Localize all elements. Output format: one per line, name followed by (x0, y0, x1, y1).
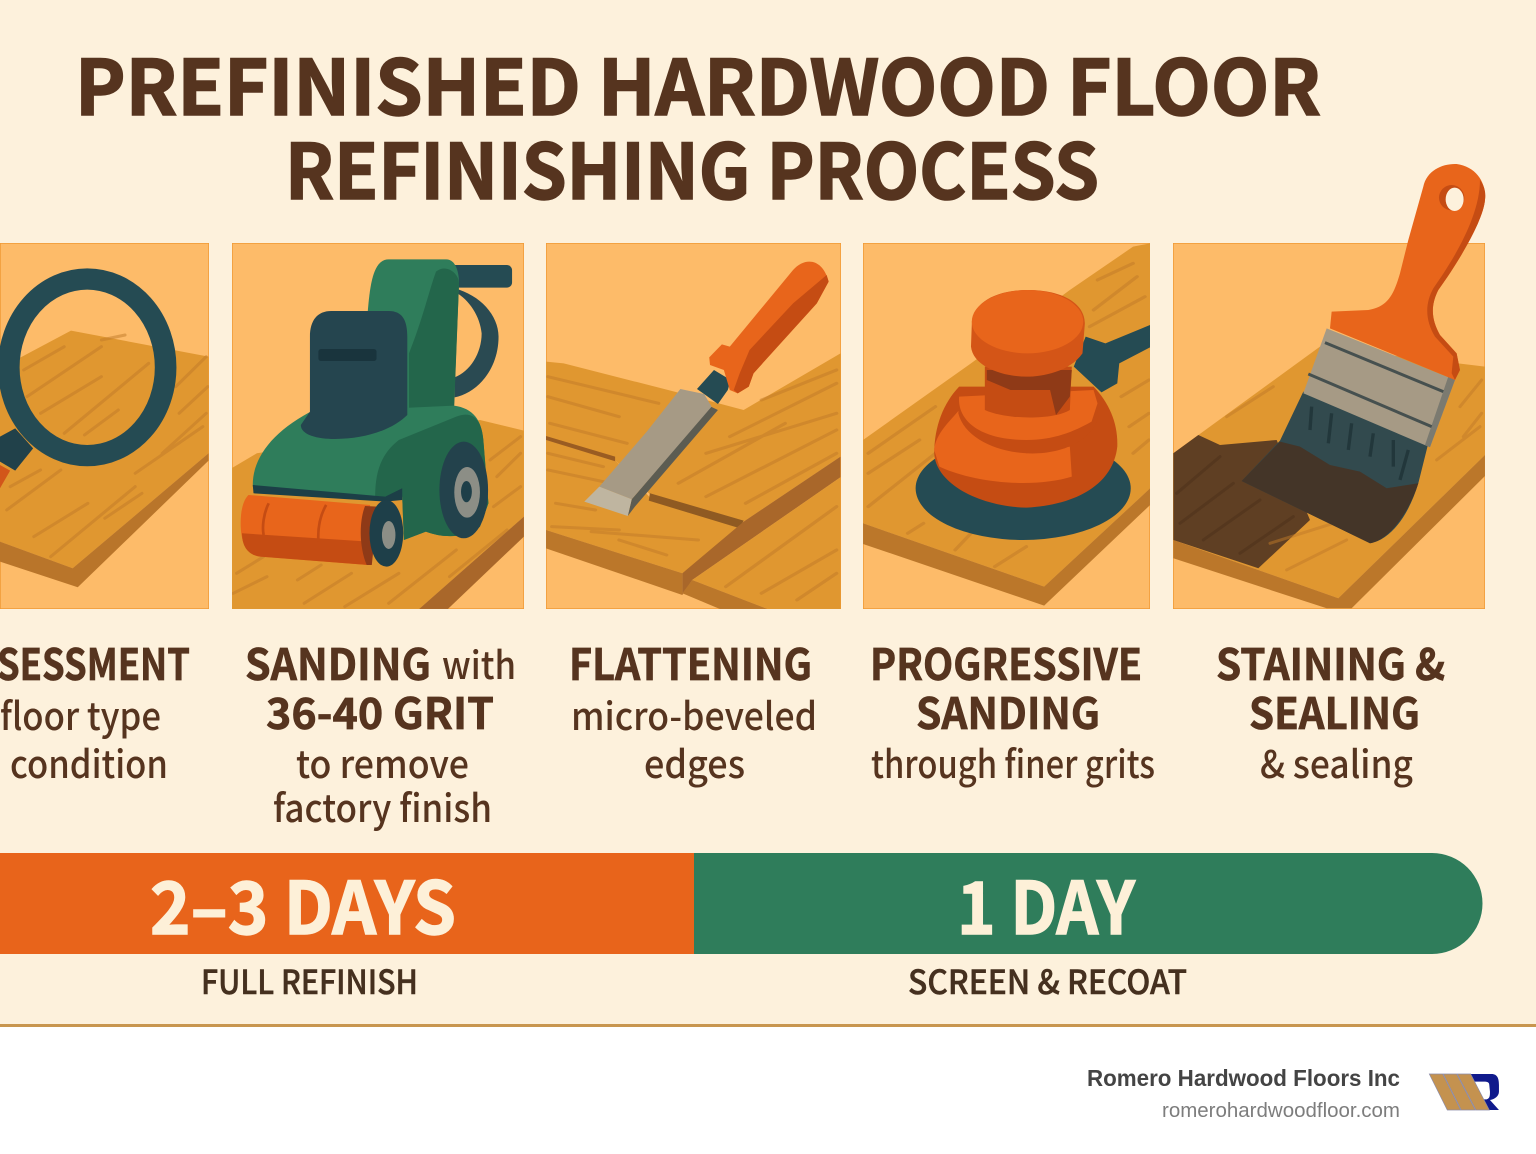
step text: sanding: factory finish (273, 778, 492, 833)
step text: staining and sealing: SEALING (1249, 680, 1420, 742)
panel: assessment illustration (0, 243, 209, 609)
step text: assessment (0, 631, 190, 789)
footer: website: romerohardwoodfloor.com (1162, 1100, 1400, 1122)
step text: assessment: SESSMENT (0, 631, 190, 693)
step text: progressive sanding: through finer grits (871, 734, 1155, 789)
step text: sanding (245, 631, 516, 833)
icon: company logo (1429, 1074, 1499, 1110)
panel: staining illustration (1173, 243, 1485, 609)
step text: sanding: 36-40 GRIT (266, 680, 494, 742)
label: full refinish: FULL REFINISH (201, 956, 418, 1004)
handle bar (450, 265, 512, 288)
motor housing (301, 311, 407, 439)
step text: sanding: SANDING (245, 631, 431, 693)
footer: company name: Romero Hardwood Floors Inc (1087, 1065, 1400, 1091)
step text: progressive sanding (870, 631, 1155, 789)
step text: sanding: with (442, 635, 516, 690)
handle loop (455, 288, 499, 397)
step text: progressive sanding: PROGRESSIVE (870, 631, 1142, 693)
step text: staining and sealing: STAINING & (1216, 631, 1445, 693)
icon: orbital sander (916, 290, 1150, 540)
upright column (368, 259, 459, 408)
step text: flattening: FLATTENING (569, 631, 812, 693)
step text: assessment: condition (10, 734, 168, 789)
step text: sanding: to remove (296, 734, 469, 789)
title: REFINISHING PROCESS (285, 111, 1099, 221)
ferrule (1303, 328, 1455, 447)
body (253, 406, 488, 540)
timeline bar: full refinish (0, 850, 694, 955)
handle (1330, 164, 1485, 380)
small wheel (369, 500, 403, 567)
bristles (1242, 392, 1428, 543)
step text: flattening: edges (644, 734, 745, 789)
panel: progressive sanding illustration (863, 243, 1150, 609)
title: PREFINISHED HARDWOOD FLOOR (75, 27, 1321, 137)
step text: assessment: floor type (0, 686, 161, 741)
panel: sanding illustration (232, 243, 524, 609)
step text: progressive sanding: SANDING (916, 680, 1100, 742)
step text: staining and sealing: & sealing (1260, 734, 1413, 789)
timeline bar: screen and recoat (694, 850, 1482, 955)
icon: paint brush (1242, 164, 1485, 543)
timeline bar: screen and recoat: 1 DAY (957, 850, 1136, 955)
icon: magnifying glass (0, 279, 166, 488)
panel: flattening illustration (546, 243, 841, 609)
timeline bar: full refinish: 2–3 DAYS (150, 850, 456, 955)
label: screen and recoat: SCREEN & RECOAT (908, 956, 1187, 1004)
step text: staining and sealing (1216, 631, 1445, 789)
step text: flattening: micro-beveled (571, 686, 817, 741)
step text: flattening (569, 631, 817, 789)
large wheel (439, 442, 488, 538)
icon: belt sander (241, 259, 512, 567)
icon: chisel (584, 262, 829, 516)
title (75, 27, 1321, 221)
roller (241, 495, 370, 565)
